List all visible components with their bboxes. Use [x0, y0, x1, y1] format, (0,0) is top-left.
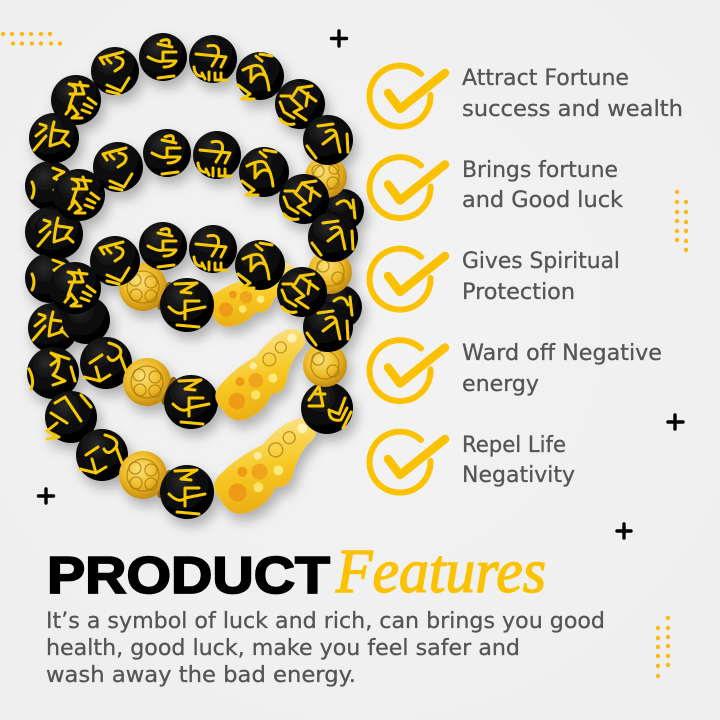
feature: Brings fortune: and Good luck	[462, 188, 623, 213]
feature: Ward off Negative energy	[370, 340, 662, 401]
feature: Repel Life Negativity	[370, 432, 575, 493]
feature: Gives Spiritual Protection: Gives Spiritual	[462, 249, 620, 274]
feature: Attract Fortune: Attract Fortune	[462, 66, 629, 91]
pixiu charm	[208, 321, 323, 429]
title: Features	[335, 538, 546, 606]
title	[47, 538, 546, 606]
feature: Repel Life Negativity: Repel Life	[462, 433, 566, 458]
description	[46, 609, 605, 688]
feature: Ward off Negative energy: energy	[462, 372, 539, 397]
icon: check mark	[370, 432, 445, 493]
feature: Brings fortune: Brings fortune	[462, 158, 618, 183]
bracelet: back, largest	[25, 33, 364, 523]
decoration: right dots	[675, 190, 688, 252]
feature: Ward off Negative energy: Ward off Negative	[462, 341, 662, 366]
feature: Gives Spiritual Protection: Protection	[462, 280, 575, 305]
icon: check mark	[370, 157, 445, 218]
feature: Gives Spiritual Protection	[370, 249, 620, 310]
product photo: three bead bracelets	[25, 33, 364, 523]
feature: Attract Fortune	[370, 66, 683, 127]
decoration: bottom-right dots	[656, 616, 670, 678]
feature: Repel Life Negativity: Negativity	[462, 463, 575, 488]
pixiu charm	[204, 258, 306, 333]
description: It’s a symbol of luck and rich, can brings you good	[46, 609, 605, 634]
icon: check mark	[370, 66, 445, 127]
feature list	[370, 66, 683, 493]
bracelet: middle	[33, 129, 358, 429]
icon: check mark	[370, 249, 445, 310]
bracelet: front, smallest	[49, 222, 327, 333]
feature: Brings fortune	[370, 157, 623, 218]
title: PRODUCT	[47, 547, 330, 605]
decoration: top-left dots	[1, 32, 62, 46]
description: wash away the bad energy.	[46, 663, 356, 688]
feature: Attract Fortune: success and wealth	[462, 97, 683, 122]
decoration: plus signs	[38, 31, 683, 538]
description: health, good luck, make you feel safer and	[46, 636, 520, 661]
pixiu charm	[207, 410, 334, 523]
icon: check mark	[370, 340, 445, 401]
